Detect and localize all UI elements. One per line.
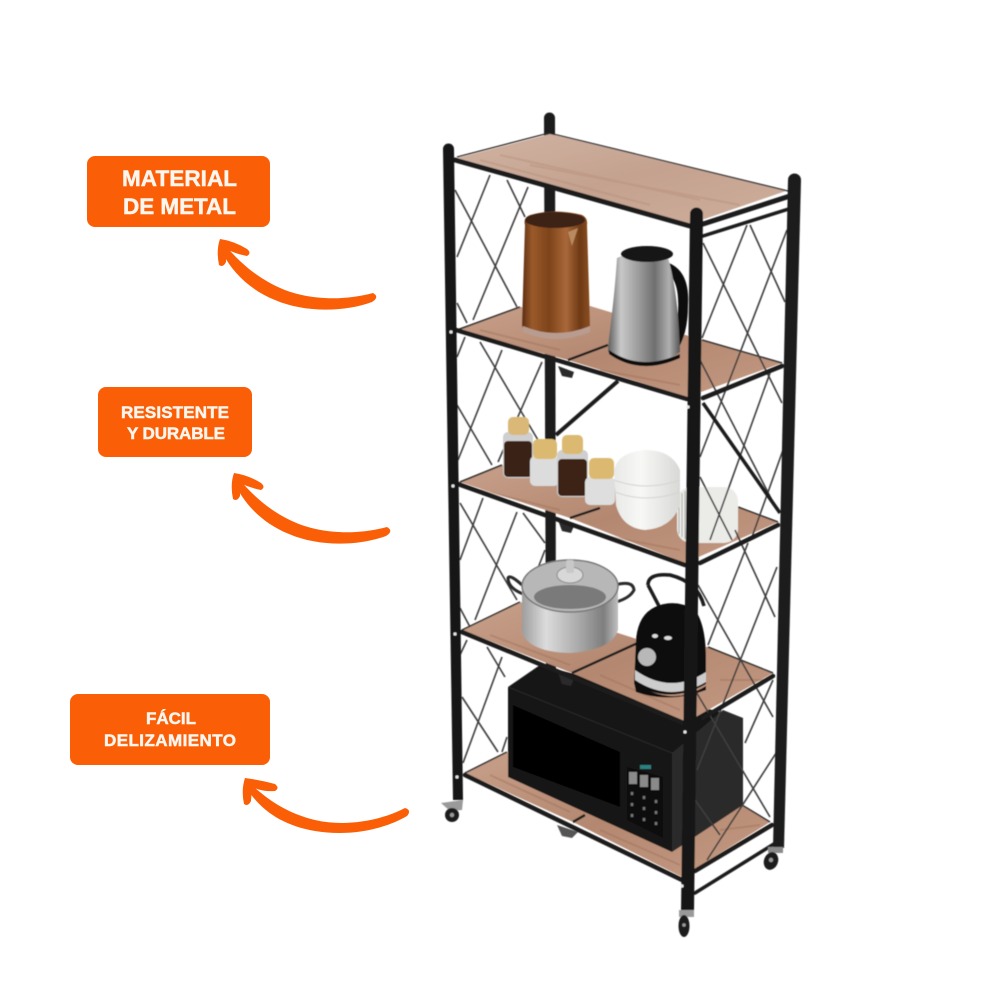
shelf seams: [568, 345, 640, 822]
arrow: to material de metal: [218, 239, 376, 310]
right diagonal strut: [703, 403, 780, 513]
shelf 2 wood: [457, 306, 782, 397]
label: material de metal: DE METAL: [123, 194, 236, 219]
black retro kettle: [634, 575, 706, 698]
stack of plates: [677, 487, 738, 543]
right front post: [681, 214, 703, 912]
jar 3: [557, 435, 588, 497]
microwave top face: [508, 665, 743, 753]
left front post: [443, 149, 463, 800]
label: resistente y durable: RESISTENTE: [121, 403, 229, 422]
shelf 5 wood: [465, 752, 770, 877]
shelf grain: [480, 330, 765, 865]
label: facil delizamiento: FÁCIL: [146, 709, 196, 728]
label: resistente y durable: Y DURABLE: [127, 424, 225, 443]
shelf back edges: [457, 307, 782, 822]
right lattice: [695, 225, 787, 860]
microwave side face: [672, 710, 743, 852]
stack of bowls: [614, 450, 680, 530]
silver kettle: [608, 246, 688, 366]
shelf 1 wood: [457, 134, 786, 224]
arrow: to facil delizamiento: [243, 778, 409, 833]
back cross strut: [556, 381, 618, 435]
shelf 4 wood: [462, 602, 773, 722]
microwave keypad: [627, 765, 663, 838]
microwave front face: [508, 687, 672, 852]
label: resistente y durable: [98, 387, 252, 457]
post rivets: [449, 330, 690, 888]
label: facil delizamiento: [70, 694, 270, 765]
back post: [544, 118, 556, 690]
spice jars: [503, 417, 615, 505]
shelf 1 back edge: [457, 133, 788, 191]
jar 2: [530, 439, 559, 486]
right back post: [773, 180, 801, 848]
microwave: [508, 665, 743, 852]
copper kettle: [522, 212, 590, 339]
shelf hinges: [557, 366, 578, 838]
label: material de metal: MATERIAL: [122, 166, 237, 191]
caster: right back: [761, 847, 783, 872]
product: folding shelf unit: [441, 112, 801, 937]
shelf 1 grain: [480, 155, 740, 205]
shelf 3 wood: [460, 465, 778, 563]
jar 1: [503, 417, 533, 478]
shelf front frames: [455, 160, 795, 893]
caster: right front: [678, 910, 694, 937]
microwave window: [513, 705, 620, 807]
arrow: to resistente y durable: [232, 473, 390, 544]
jar 4: [585, 458, 615, 505]
cooking pot: [508, 560, 634, 653]
caster: left front: [441, 800, 463, 822]
label: material de metal: [87, 156, 270, 227]
label: facil delizamiento: DELIZAMIENTO: [104, 731, 236, 750]
left lattice: [455, 175, 545, 763]
